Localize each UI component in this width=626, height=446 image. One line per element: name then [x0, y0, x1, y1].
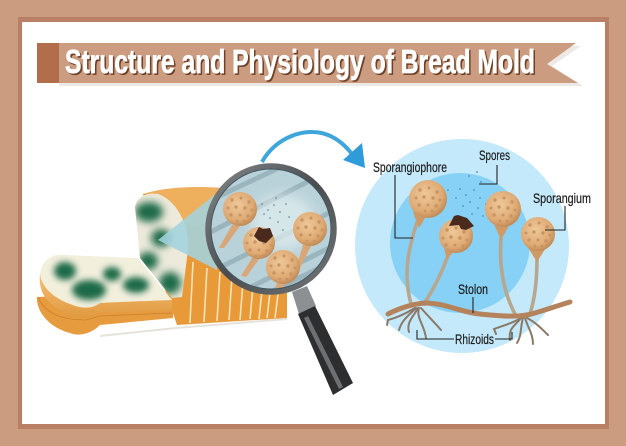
- label: Sporangiophore: Sporangiophore: [373, 159, 447, 175]
- label: Sporangium: Sporangium: [533, 190, 591, 206]
- magnifier view cone: [158, 193, 217, 270]
- loaf body: [143, 187, 287, 325]
- sporangium 1: [409, 180, 447, 228]
- sporangium 4: [521, 217, 555, 262]
- moldy loaf face: [135, 194, 188, 298]
- mold diagram circle: [355, 139, 569, 353]
- sporangium 3: [485, 191, 521, 240]
- upper slice crust: [40, 274, 172, 318]
- stolon: [388, 302, 570, 316]
- rhizoids: [387, 308, 548, 344]
- diagonal stripes: [212, 170, 329, 288]
- label: Rhizoids: Rhizoids: [455, 331, 494, 347]
- lens ring: [208, 166, 334, 292]
- slice lines: [190, 262, 278, 323]
- loaf top crust: [143, 187, 222, 225]
- sporangium 2 burst: [439, 215, 474, 260]
- upper slice moldy top: [40, 255, 172, 308]
- label: Stolon: Stolon: [458, 281, 488, 297]
- sporangium lens 2 burst: [241, 227, 275, 277]
- bread loaf: [100, 187, 287, 336]
- mold patches on slice: [54, 262, 149, 300]
- spores cloud: [261, 197, 290, 231]
- sporangium lens 4: [266, 250, 300, 288]
- sporangium lens 1: [219, 192, 257, 248]
- mold patches on loaf: [135, 202, 181, 294]
- leader lines: [395, 165, 565, 339]
- lower slice: [37, 296, 173, 335]
- lens: [212, 170, 330, 288]
- title banner: [37, 43, 583, 86]
- ground shadow: [100, 319, 287, 336]
- magnifying glass: [200, 165, 353, 395]
- handle: [292, 286, 353, 395]
- bread slices in front: [37, 255, 173, 335]
- curved blue arrow: [262, 132, 365, 168]
- stalks: [407, 222, 537, 316]
- spores: [447, 171, 487, 217]
- label: Spores: Spores: [479, 147, 510, 163]
- sporangium lens 3: [293, 212, 327, 268]
